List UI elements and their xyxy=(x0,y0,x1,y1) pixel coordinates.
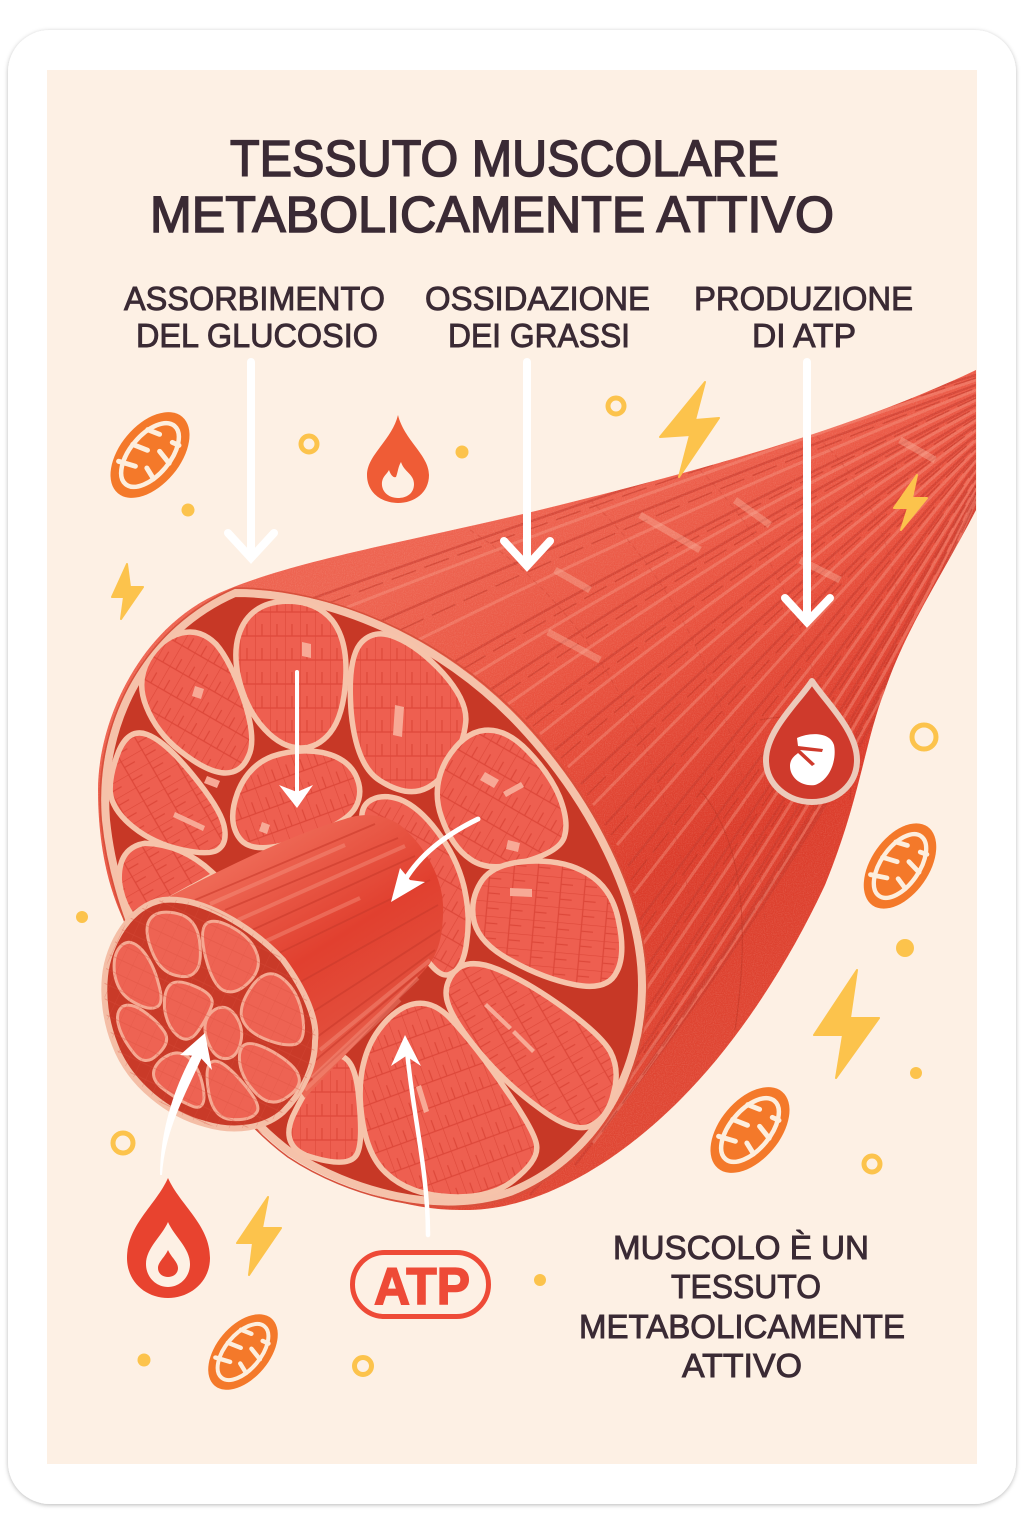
extruded bundle xyxy=(104,815,443,1128)
label: glucose uptake: DEL GLUCOSIO xyxy=(136,317,378,354)
icon: ATP badge: ATP xyxy=(374,1258,470,1316)
caption xyxy=(579,1229,905,1384)
bundle cap fascicles xyxy=(116,914,302,1118)
title: METABOLICAMENTE ATTIVO xyxy=(150,186,834,243)
label: ATP production: PRODUZIONE xyxy=(694,280,913,317)
caption: MUSCOLO È UN xyxy=(613,1229,869,1266)
fascicle behind bundle xyxy=(364,799,465,972)
arrow: from drop to bundle xyxy=(160,1033,212,1175)
fascicle bottom left xyxy=(292,1058,358,1160)
muscle outer body xyxy=(98,370,976,1210)
fascicle light marks xyxy=(173,642,535,1113)
arrow: glucose uptake xyxy=(228,362,274,558)
label: glucose uptake: ASSORBIMENTO xyxy=(124,280,385,317)
fascicle bottom xyxy=(363,1006,534,1194)
icon: mitochondrion lower right xyxy=(695,1072,805,1188)
fascicle left xyxy=(113,736,222,850)
label: ATP production xyxy=(694,280,913,354)
fascicle top right xyxy=(353,637,463,789)
grain overlay xyxy=(90,360,980,1220)
icon: drop on muscle xyxy=(766,681,857,802)
arrow: fat oxidation xyxy=(504,362,550,566)
caption: ATTIVO xyxy=(682,1347,802,1384)
icon: fat flame drop xyxy=(367,415,429,503)
longitudinal fibres xyxy=(308,375,976,1195)
icon: ATP badge xyxy=(352,1252,488,1316)
icon: mitochondrion top left xyxy=(95,397,205,513)
label: glucose uptake xyxy=(124,280,385,354)
fascicle centre xyxy=(235,754,357,845)
muscle fascicles xyxy=(113,604,619,1194)
label: fat oxidation xyxy=(425,280,650,354)
fascicle lower right xyxy=(449,966,613,1125)
fascicle left lower xyxy=(122,846,210,915)
icon: blood drop xyxy=(127,1178,210,1298)
icons: dots xyxy=(76,446,922,1366)
title xyxy=(150,130,834,243)
icon: mitochondrion bottom left xyxy=(194,1301,292,1403)
bundle cap xyxy=(104,900,315,1128)
cap texture xyxy=(104,900,315,1128)
body seam lines xyxy=(700,717,851,1030)
label: ATP production: DI ATP xyxy=(752,317,856,354)
sheath outer line xyxy=(100,588,647,1207)
arrow: ATP production xyxy=(785,362,830,622)
fascicle top centre xyxy=(239,604,343,745)
icons: ring bubbles xyxy=(113,398,936,1374)
arrow: inner to bundle xyxy=(391,819,478,902)
fascicle top left xyxy=(144,635,249,770)
bundle fibres xyxy=(195,824,440,1085)
label: fat oxidation: OSSIDAZIONE xyxy=(425,280,650,317)
icons: energy bolts xyxy=(112,382,927,1275)
arrow: inner down xyxy=(279,672,313,808)
bundle side xyxy=(159,815,443,1098)
label: fat oxidation: DEI GRASSI xyxy=(448,317,630,354)
arrow: from ATP to bundle xyxy=(391,1035,428,1235)
title: TESSUTO MUSCOLARE xyxy=(230,130,779,187)
cross-section cavity with sheath xyxy=(105,593,642,1202)
fascicle right upper xyxy=(440,733,563,864)
caption: METABOLICAMENTE xyxy=(579,1308,905,1345)
caption: TESSUTO xyxy=(671,1268,821,1305)
icon: mitochondrion right xyxy=(849,810,951,922)
fascicle right xyxy=(475,864,619,984)
muscle illustration xyxy=(90,360,980,1220)
cross bands xyxy=(470,430,900,920)
